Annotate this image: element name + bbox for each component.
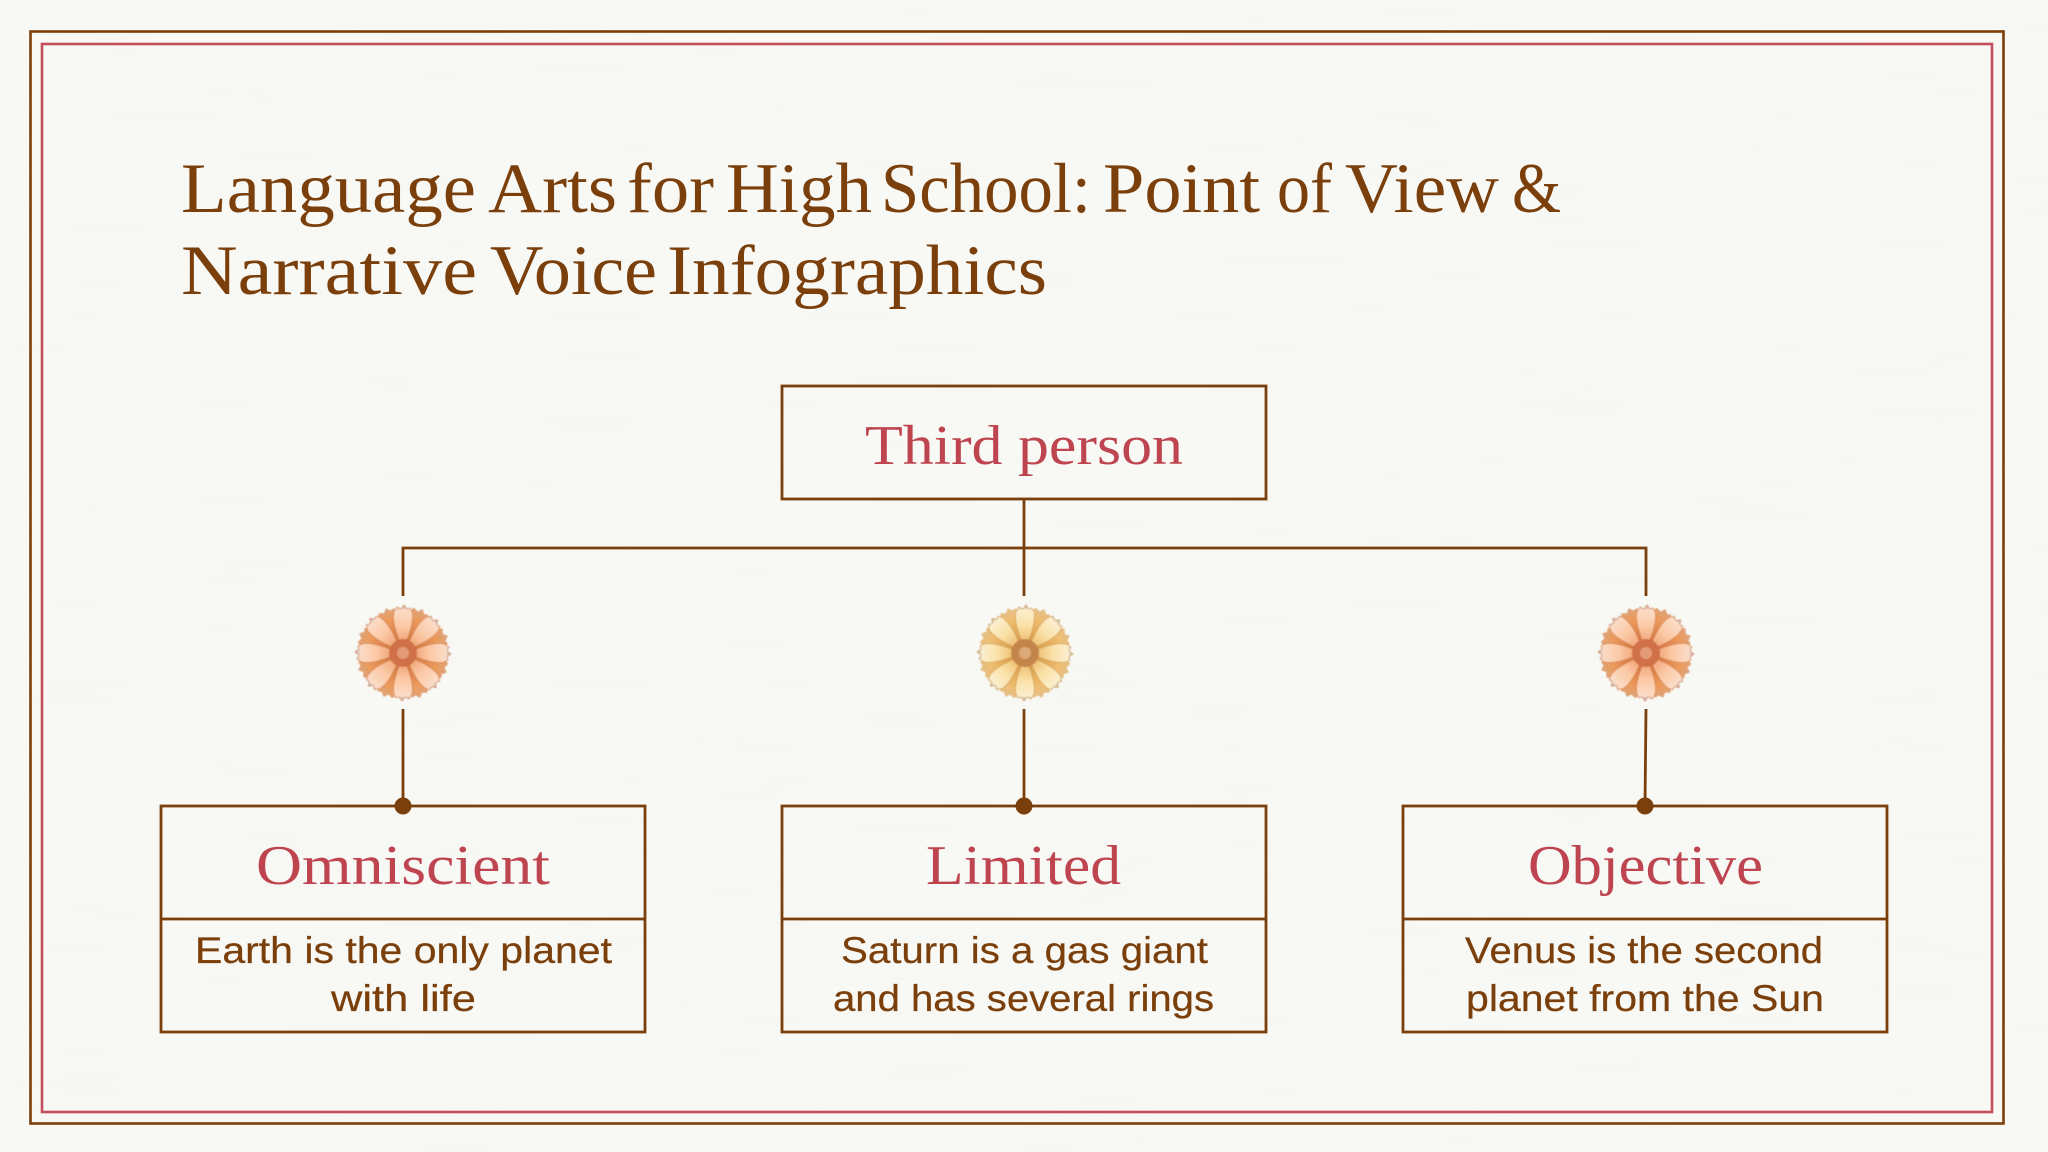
title: Infographics [667, 232, 1047, 310]
description: Omniscient: Earth is the only planet [195, 930, 613, 971]
title: View [1345, 150, 1499, 228]
description: Limited: and has several rings [833, 978, 1214, 1019]
heading: Limited: Limited [926, 835, 1121, 897]
title: Point [1103, 150, 1260, 228]
title: School: [881, 150, 1091, 228]
connector dot [1636, 798, 1654, 814]
icon: flower left [354, 604, 452, 702]
description: Objective [1465, 930, 1824, 1019]
top box: Third person: Third person [865, 415, 1183, 477]
title: of [1277, 150, 1332, 228]
panel: Omniscient [161, 709, 645, 1032]
description: Limited [833, 930, 1214, 1019]
connector to Limited [1023, 709, 1025, 806]
title: High [726, 150, 872, 228]
title: & [1512, 150, 1561, 228]
title: Voice [490, 232, 657, 310]
connector to Objective [1645, 709, 1646, 806]
icon: flower right [1597, 604, 1695, 702]
connector to Omniscient [402, 709, 404, 806]
connector dot [394, 798, 412, 814]
panel: Objective [1403, 709, 1887, 1032]
description: Omniscient [195, 930, 613, 1019]
title [181, 150, 1561, 310]
description: Objective: planet from the Sun [1466, 978, 1824, 1019]
heading: Objective: Objective [1528, 835, 1763, 897]
heading: Omniscient: Omniscient [256, 835, 550, 897]
description: Limited: Saturn is a gas giant [841, 930, 1209, 971]
title: for [627, 150, 714, 228]
panel: Limited [782, 709, 1266, 1032]
connector dot [1016, 798, 1032, 814]
connector tree [403, 499, 1646, 596]
description: Objective: Venus is the second [1465, 930, 1823, 971]
top box: Third person [782, 386, 1266, 499]
title: Narrative [181, 232, 477, 310]
title: Arts [488, 150, 617, 228]
description: Omniscient: with life [330, 978, 476, 1019]
title: Language [181, 150, 476, 228]
icon: flower centre [976, 604, 1074, 702]
